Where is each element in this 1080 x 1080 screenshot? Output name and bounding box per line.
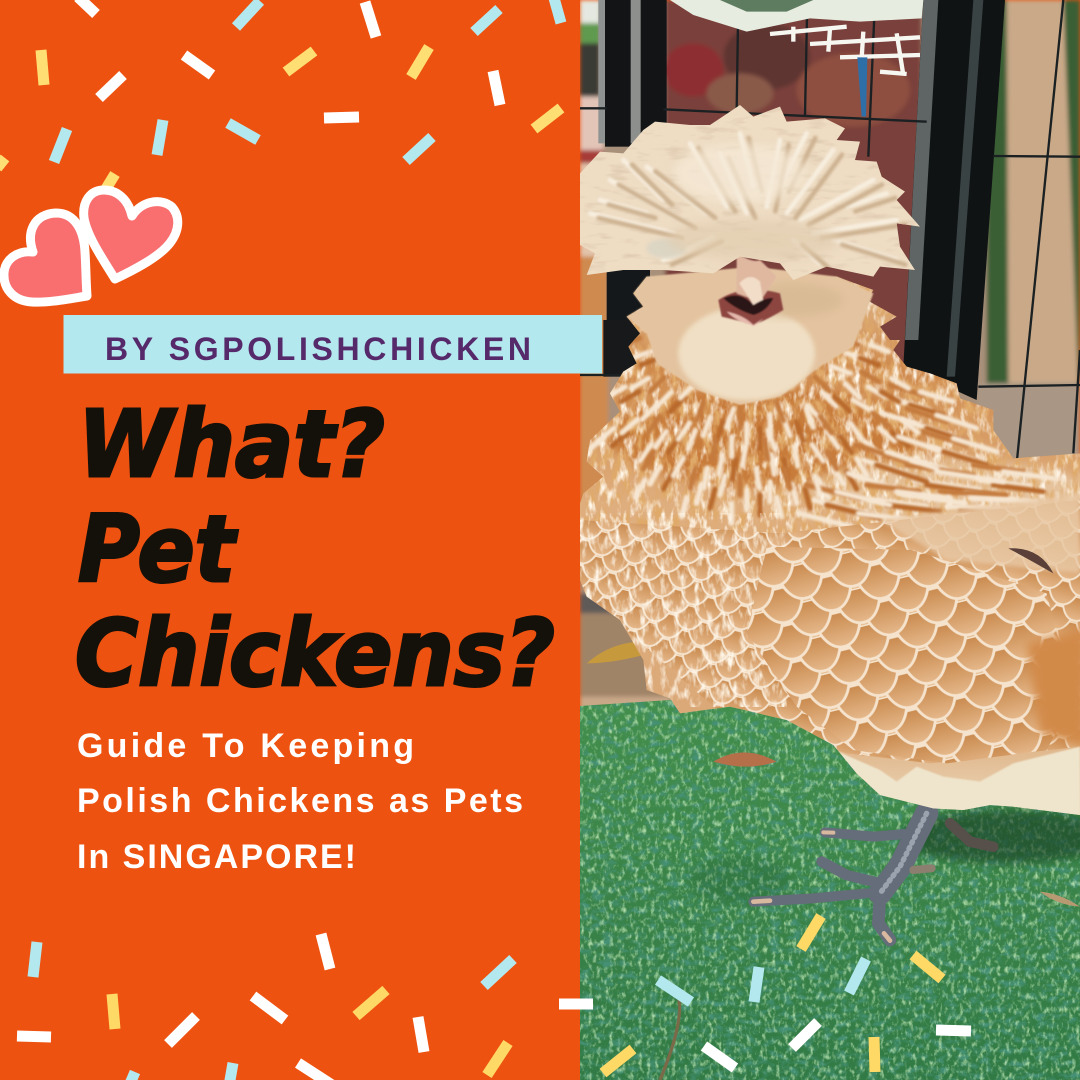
white sprinkles — [78, 0, 500, 118]
confetti: bottom cluster — [17, 916, 971, 1080]
neck hackle streaks — [580, 283, 1080, 550]
right heart — [84, 190, 178, 279]
left heart — [4, 213, 87, 302]
chicken feet — [753, 813, 993, 941]
orange background panel — [0, 0, 581, 1080]
cyan sprinkles — [54, 0, 561, 162]
photo: Polish chicken standing on grass — [580, 0, 1080, 1080]
yellow sprinkles — [0, 47, 561, 192]
chicken body plumage — [580, 267, 1080, 833]
scalloped breast feathers — [580, 493, 1080, 763]
title line 2: Pet — [78, 496, 238, 603]
white sprinkles — [17, 934, 971, 1080]
white net — [670, 0, 923, 117]
feathered crest — [580, 100, 923, 287]
chin and face fluff — [627, 267, 873, 405]
subtitle line 3: In SINGAPORE! — [77, 838, 356, 876]
wire mesh — [580, 0, 1080, 463]
cyan sprinkles — [33, 942, 866, 1080]
yellow sprinkles — [112, 916, 942, 1075]
title line 1: What? — [78, 391, 385, 498]
title line 3: Chickens? — [75, 600, 555, 707]
beak and wattles — [718, 253, 783, 326]
subtitle line 2: Polish Chickens as Pets — [77, 782, 523, 820]
pale under-fluff — [838, 746, 1080, 815]
confetti: top cluster — [0, 0, 561, 192]
subtitle line 1: Guide To Keeping — [77, 727, 414, 765]
coop door posts — [598, 0, 1005, 400]
subtitle — [77, 727, 523, 876]
fallen leaves — [587, 642, 1080, 1080]
grass lawn — [580, 697, 1080, 1080]
photo background: coop, tree and ground — [580, 0, 1080, 733]
byline text: BY SGPOLISHCHICKEN — [105, 331, 531, 367]
byline banner — [64, 315, 602, 374]
icon: twin hearts — [4, 190, 178, 302]
title — [75, 391, 555, 707]
